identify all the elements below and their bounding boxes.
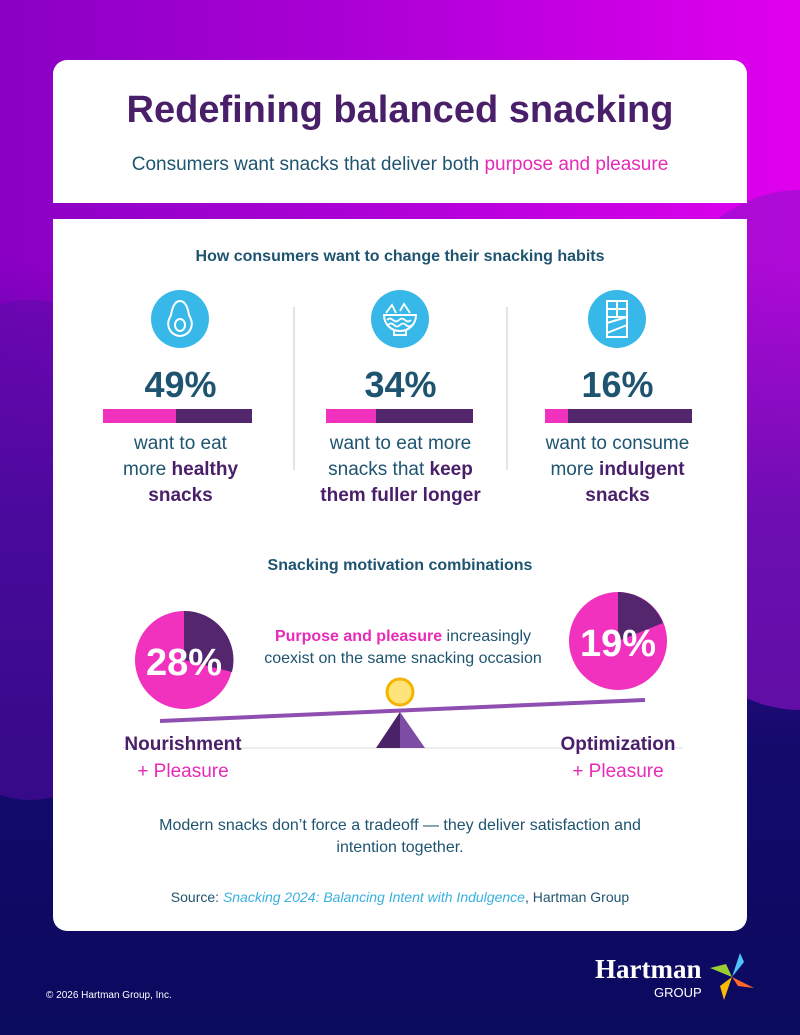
summary text	[159, 817, 641, 856]
fulcrum	[376, 712, 425, 748]
stat column 3	[545, 290, 692, 506]
label optimization: + Pleasure	[572, 761, 664, 782]
label 1: snacks	[148, 485, 213, 506]
bar 34	[326, 409, 473, 423]
pie 19	[569, 592, 667, 690]
pie 19: 19%	[580, 623, 656, 665]
summary text: intention together.	[336, 839, 464, 856]
pie 28	[135, 611, 233, 709]
label nourishment	[124, 734, 242, 782]
logo: GROUP	[654, 985, 702, 1000]
source: Source: Snacking 2024: Balancing Intent with Indulgence, Hartman Group	[171, 889, 629, 905]
icon: pinwheel	[710, 953, 754, 1000]
label optimization: Optimization	[560, 734, 676, 755]
coin	[387, 679, 413, 705]
label 3	[546, 433, 689, 506]
bar 49	[103, 409, 252, 423]
logo: Hartman	[595, 954, 701, 984]
label 3: snacks	[585, 485, 650, 506]
label 1	[123, 433, 238, 506]
section heading: combinations: Snacking motivation combinations	[268, 557, 532, 574]
icon: bowl	[371, 290, 429, 348]
pie 28: 28%	[146, 642, 222, 684]
label 2: want to eat more	[330, 433, 471, 454]
icon: chocolate	[588, 290, 646, 348]
beam	[160, 700, 645, 721]
main card	[53, 219, 747, 931]
percent 49: 49%	[144, 364, 217, 405]
header card	[53, 60, 747, 203]
copyright: © 2026 Hartman Group, Inc.	[46, 990, 172, 1001]
section heading: habits: How consumers want to change their snacking habits	[196, 248, 604, 265]
logo	[595, 953, 754, 1000]
callout text: Purpose and pleasure increasingly coexist on the same snacking occasion	[264, 628, 542, 667]
stat column 2	[320, 290, 481, 506]
percent 16: 16%	[581, 364, 654, 405]
background blob left	[0, 300, 180, 800]
summary text: Modern snacks don’t force a tradeoff — they deliver satisfaction and	[159, 817, 641, 834]
balance chart	[123, 592, 683, 749]
percent 34: 34%	[364, 364, 437, 405]
stat column 1	[103, 290, 252, 506]
background blob	[620, 190, 800, 710]
label nourishment: Nourishment	[124, 734, 242, 755]
label 2: them fuller longer	[320, 485, 481, 506]
label optimization	[560, 734, 676, 782]
label 1: more healthy	[123, 459, 238, 480]
label 2	[320, 433, 481, 506]
label 1: want to eat	[134, 433, 227, 454]
label 3: more indulgent	[550, 459, 685, 480]
icon: avocado	[151, 290, 209, 348]
subtitle: Consumers want snacks that deliver both purpose and pleasure	[132, 154, 668, 175]
bar 16	[545, 409, 692, 423]
title: Redefining balanced snacking	[127, 89, 673, 131]
label nourishment: + Pleasure	[137, 761, 229, 782]
label 3: want to consume	[546, 433, 689, 454]
label 2: snacks that keep	[328, 459, 473, 480]
